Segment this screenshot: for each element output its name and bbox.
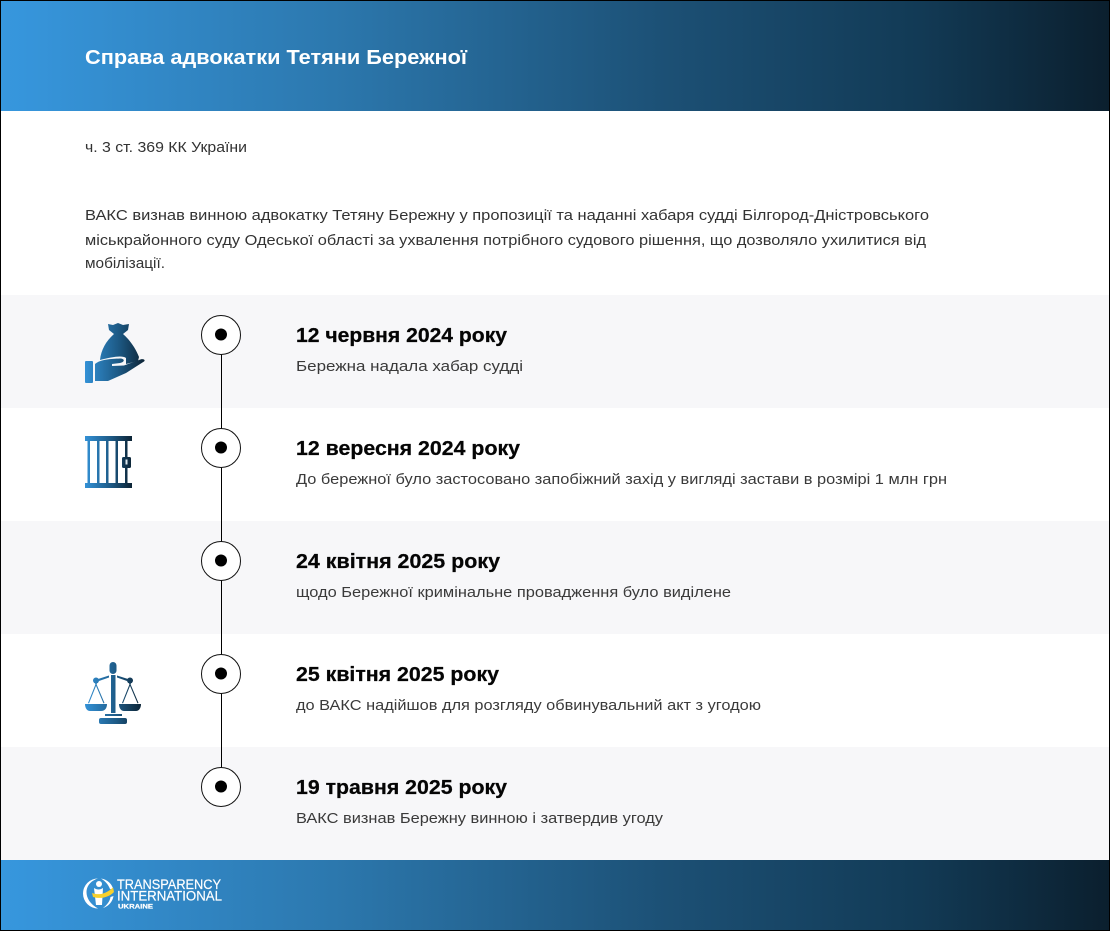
date: 24 квітня 2025 року	[296, 551, 501, 573]
icon: prison bars	[85, 436, 132, 488]
timeline event: 12 September 2024	[85, 428, 947, 488]
case summary paragraph: міськрайонного суду Одеської області за ухвалення потрібного судового рішення, що дозволяло ухилитися від	[85, 232, 926, 249]
date: 25 квітня 2025 року	[296, 664, 500, 686]
case summary paragraph: мобілізації.	[85, 255, 165, 272]
description: Бережна надала хабар судді	[296, 358, 523, 375]
timeline event: 25 April 2025	[85, 654, 761, 724]
description: ВАКС визнав Бережну винною і затвердив угоду	[296, 810, 664, 827]
logo wordmark	[117, 877, 222, 910]
logo wordmark: UKRAINE	[118, 904, 153, 910]
timeline marker	[202, 768, 240, 806]
logo: Transparency International Ukraine	[83, 877, 222, 910]
description: щодо Бережної кримінальне провадження було виділене	[296, 584, 731, 601]
case summary paragraph: ВАКС визнав винною адвокатку Тетяну Бережну у пропозиції та наданні хабаря судді Білгород-Дністровського	[85, 207, 929, 224]
timeline marker	[202, 428, 240, 468]
timeline event: 24 April 2025	[202, 542, 731, 601]
legal article reference: ч. 3 ст. 369 КК України	[85, 139, 247, 156]
description: До бережної було застосовано запобіжний захід у вигляді застави в розмірі 1 млн грн	[296, 471, 947, 488]
timeline event: 19 May 2025	[202, 768, 664, 827]
title: Справа адвокатки Тетяни Бережної	[85, 47, 467, 69]
timeline marker	[202, 654, 240, 694]
icon: money bag on hand	[85, 323, 145, 383]
date: 12 вересня 2024 року	[296, 438, 521, 460]
header banner	[1, 1, 1109, 111]
description: до ВАКС надійшов для розгляду обвинувальний акт з угодою	[296, 697, 761, 714]
logo emblem	[83, 878, 114, 908]
timeline marker	[202, 316, 240, 354]
icon: scales of justice	[85, 662, 141, 724]
date: 19 травня 2025 року	[296, 777, 508, 799]
timeline connector line	[220, 334, 222, 787]
timeline event: 12 June 2024	[85, 316, 523, 383]
date: 12 червня 2024 року	[296, 325, 508, 347]
timeline marker	[202, 542, 240, 580]
logo wordmark: TRANSPARENCY	[117, 877, 221, 892]
case summary paragraph	[85, 207, 929, 272]
row backgrounds	[1, 295, 1109, 860]
logo wordmark: INTERNATIONAL	[117, 888, 222, 904]
footer banner	[1, 860, 1109, 930]
